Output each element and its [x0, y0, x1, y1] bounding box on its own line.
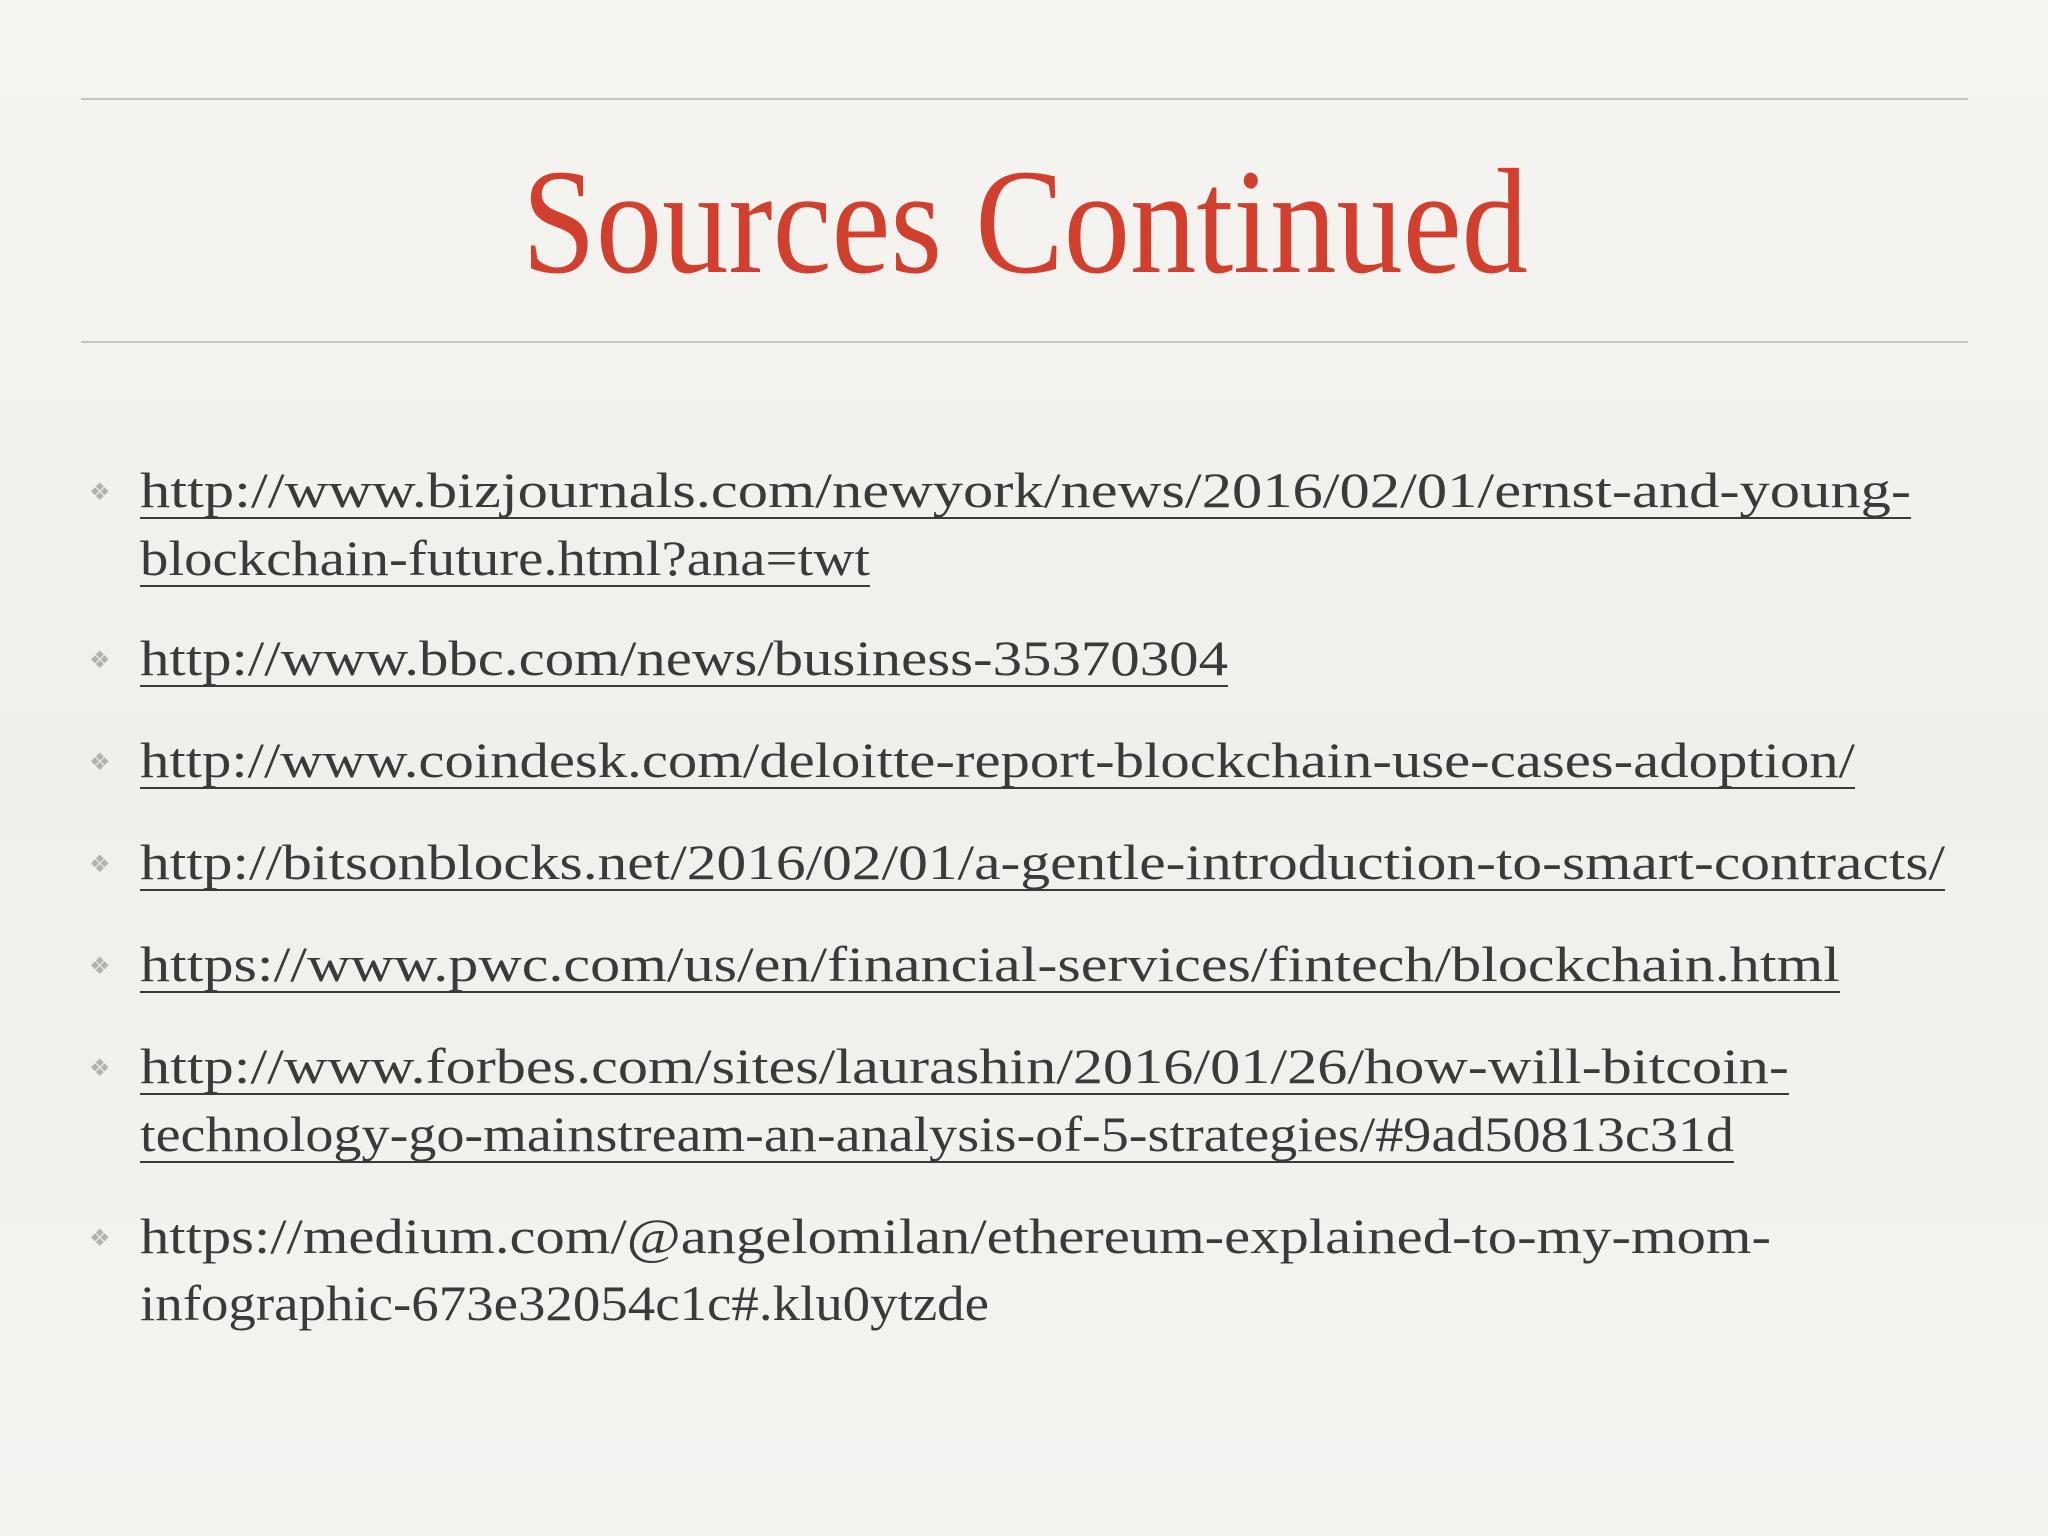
source 2: ❖ — [89, 648, 111, 674]
source list — [89, 462, 1945, 1331]
source 5: ❖ — [89, 954, 111, 980]
source 7 — [89, 1208, 1771, 1331]
source 3: ❖ — [89, 750, 111, 776]
source 1: blockchain-future.html?ana=twt — [140, 530, 870, 586]
source 2: http://www.bbc.com/news/business-35370304 — [140, 630, 1228, 686]
source 5: https://www.pwc.com/us/en/financial-services/fintech/blockchain.html — [140, 936, 1840, 992]
source 3: http://www.coindesk.com/deloitte-report-blockchain-use-cases-adoption/ — [140, 732, 1855, 788]
source 6: technology-go-mainstream-an-analysis-of-5-strategies/#9ad50813c31d — [140, 1106, 1734, 1162]
source 6: ❖ — [89, 1056, 111, 1082]
title: Sources Continued — [522, 139, 1528, 305]
source 7: infographic-673e32054c1c#.klu0ytzde — [140, 1275, 989, 1331]
source 4: ❖ — [89, 852, 111, 878]
source 1: http://www.bizjournals.com/newyork/news/2016/02/01/ernst-and-young- — [140, 462, 1911, 518]
source 1: ❖ — [89, 480, 111, 506]
source 7: ❖ — [89, 1226, 111, 1252]
source 4: http://bitsonblocks.net/2016/02/01/a-gentle-introduction-to-smart-contracts/ — [140, 834, 1945, 890]
source 6 — [89, 1038, 1789, 1162]
source 1 — [89, 462, 1911, 586]
source 7: https://medium.com/@angelomilan/ethereum-explained-to-my-mom- — [140, 1208, 1771, 1264]
source 6: http://www.forbes.com/sites/laurashin/2016/01/26/how-will-bitcoin- — [140, 1038, 1789, 1094]
